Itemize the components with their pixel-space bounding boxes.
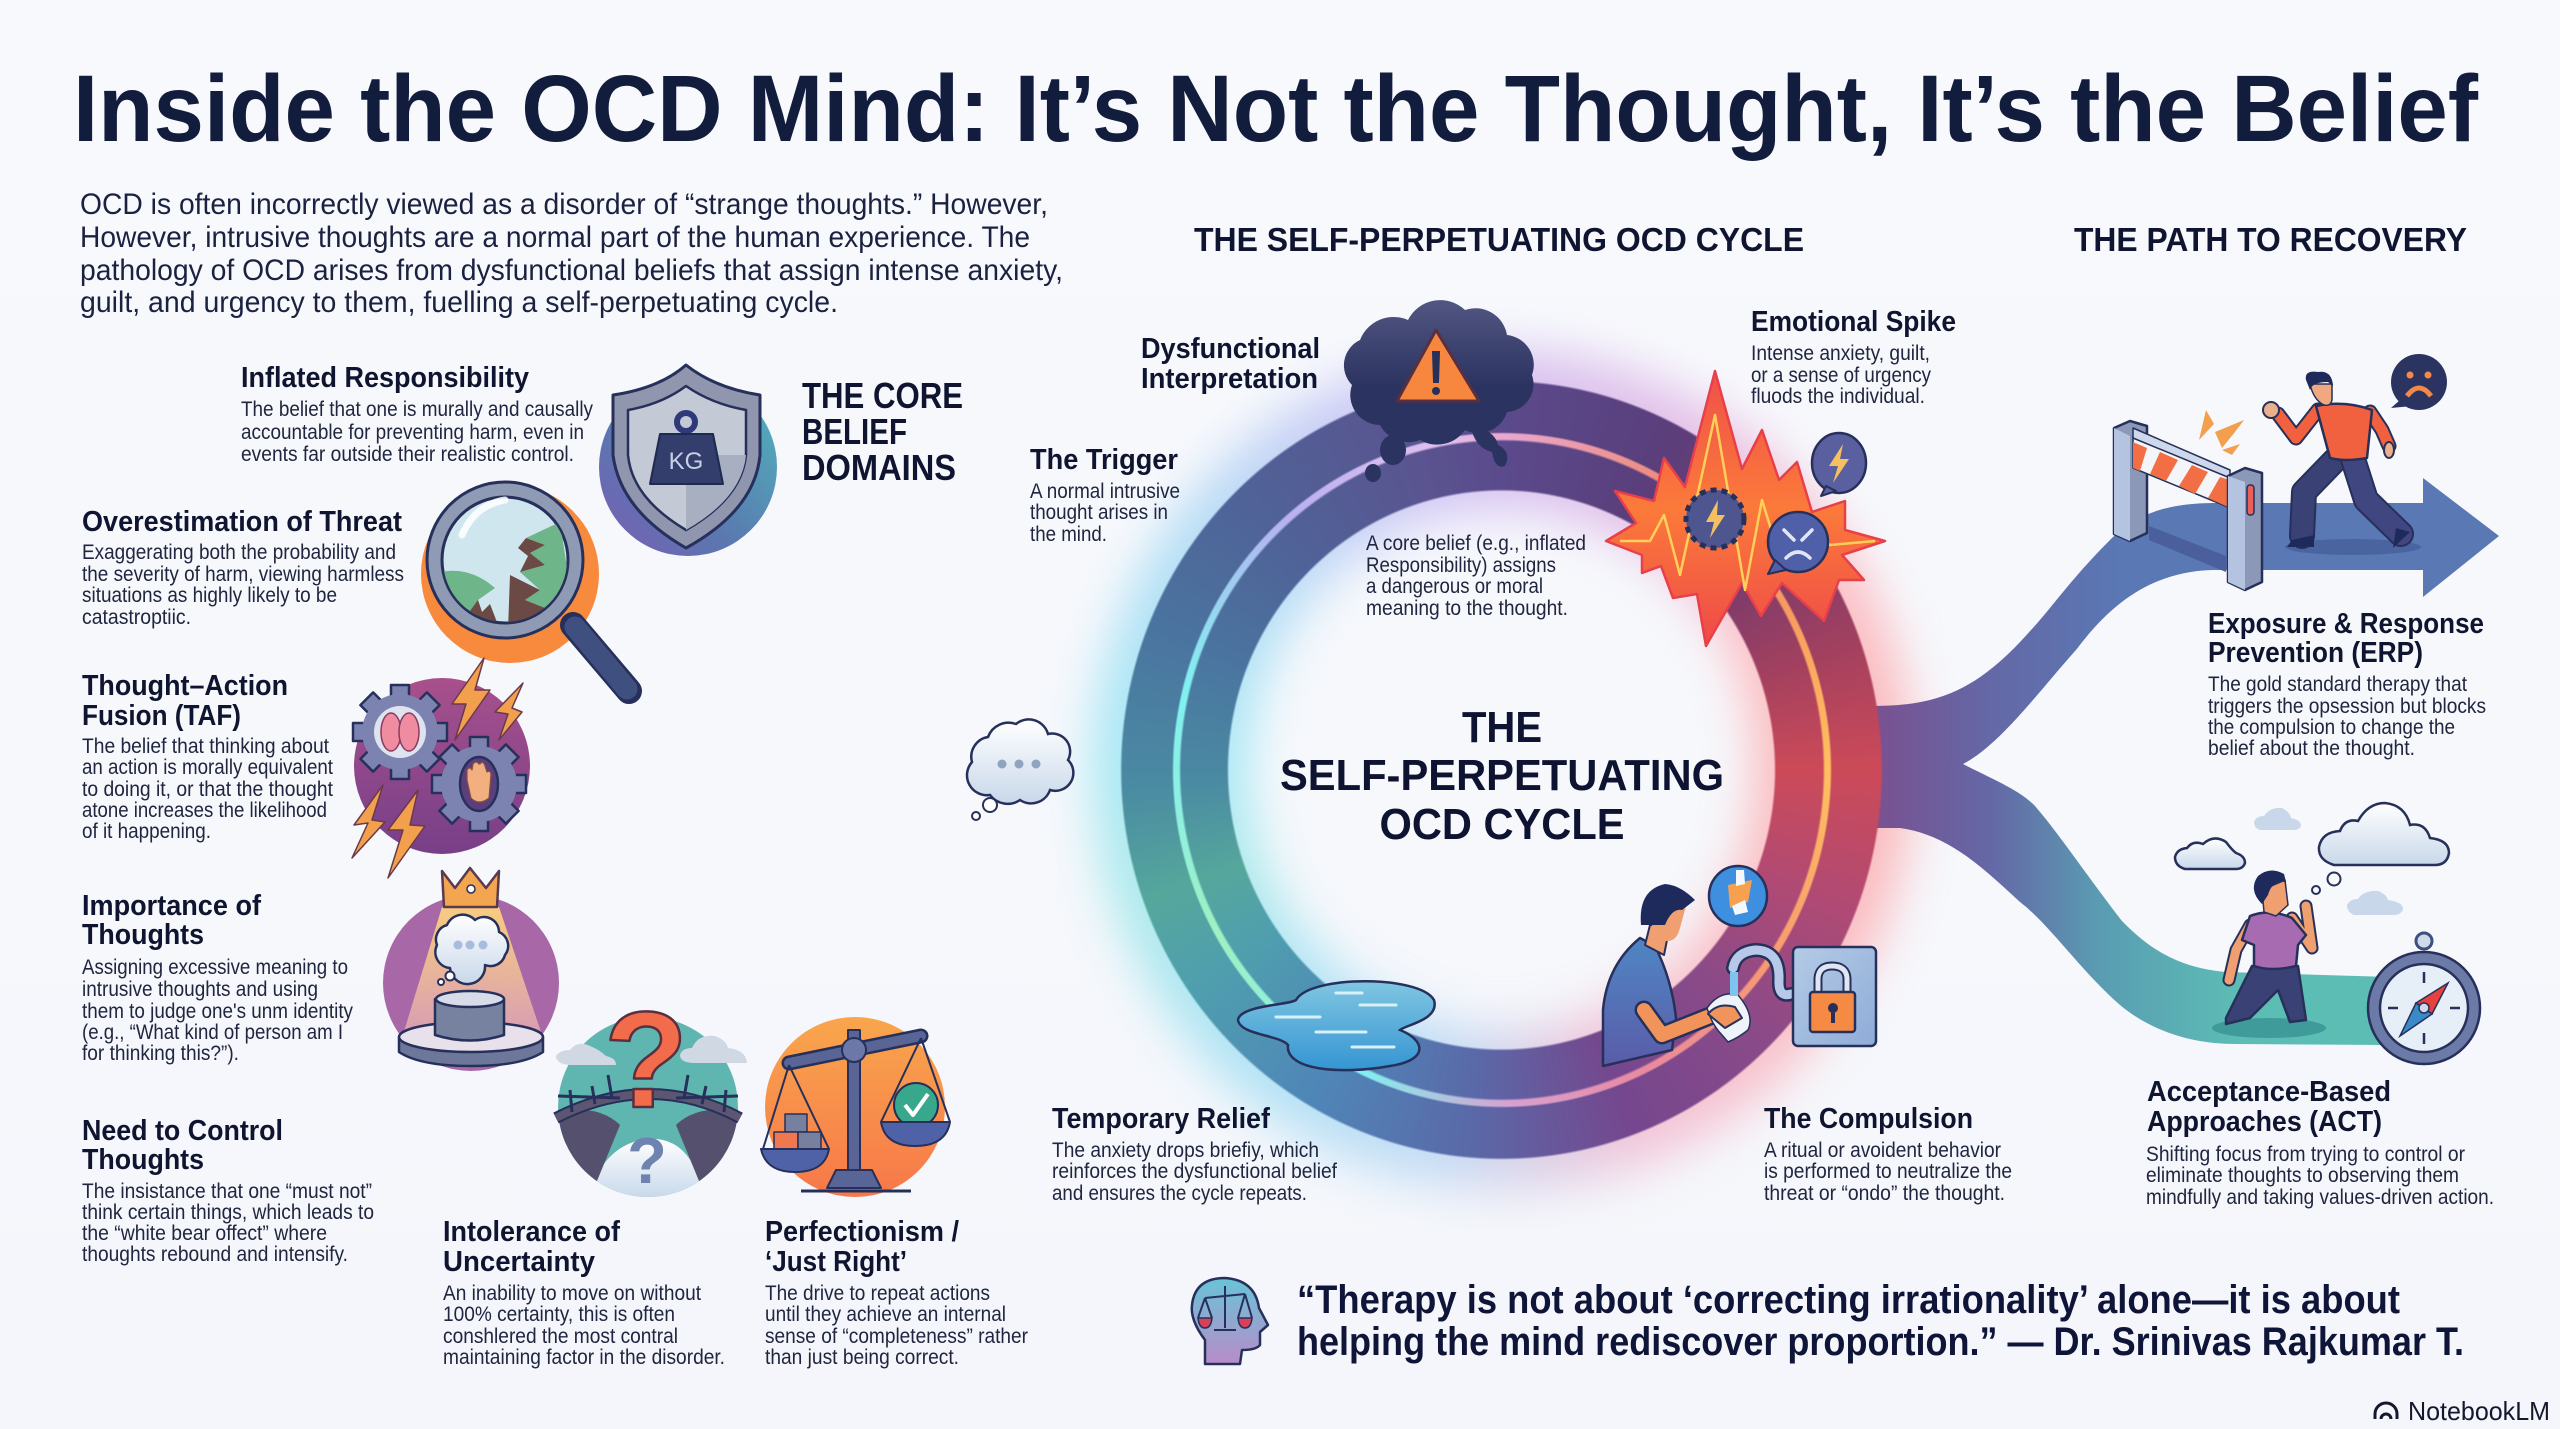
- icon: shield with weight: KG: [669, 448, 703, 475]
- panel: perfectionism text: Perfectionism /: [765, 1216, 959, 1248]
- panel: need to control thoughts text: Thoughts: [82, 1144, 204, 1176]
- NotebookLM mark: NotebookLM: [2408, 1396, 2550, 1426]
- panel: importance of thoughts text: Importance of: [82, 890, 261, 922]
- text: dysfunctional interpretation description: meaning to the thought.: [1366, 597, 1568, 620]
- heading: cycle section: THE SELF-PERPETUATING OCD CYCLE: [1194, 221, 1804, 258]
- arrow: acceptance path: [1870, 764, 2390, 1045]
- label: dysfunctional interpretation: Dysfunctional: [1141, 333, 1320, 365]
- arrow: exposure path: [1870, 478, 2499, 768]
- heading: cycle center title: THE: [1462, 703, 1542, 752]
- panel: thought action fusion text: Fusion (TAF): [82, 700, 241, 732]
- label: exposure and response prevention: Prevention (ERP): [2208, 637, 2423, 669]
- label: the trigger: [1030, 444, 1180, 546]
- icon: dark cloud with warning sign: [1344, 300, 1534, 482]
- label: dysfunctional interpretation: Interpretation: [1141, 363, 1318, 395]
- intro text block: [80, 188, 1063, 319]
- panel: perfectionism text: [765, 1216, 1028, 1369]
- panel: overestimation of threat text: the severity of harm, viewing harmless: [82, 563, 404, 586]
- heading: cycle center title: [1280, 703, 1724, 849]
- panel: overestimation of threat text: [82, 506, 404, 629]
- text: dysfunctional interpretation description: A core belief (e.g., inflated: [1366, 532, 1586, 555]
- panel: importance of thoughts text: [82, 890, 353, 1065]
- icon: puddle: [1238, 981, 1435, 1070]
- label: temporary relief: [1052, 1103, 1337, 1205]
- icon: contamination bubble: [1709, 866, 1767, 926]
- panel: need to control thoughts text: The insistance that one “must not”: [82, 1180, 372, 1203]
- label: acceptance-based approaches: Approaches (ACT): [2147, 1106, 2382, 1138]
- panel: inflated responsibility text: accountable for preventing harm, even in: [241, 421, 584, 444]
- label: the trigger: the mind.: [1030, 523, 1107, 546]
- intro text block: pathology of OCD arises from dysfunctional beliefs that assign intense anxiety,: [80, 254, 1063, 287]
- label: the compulsion: A ritual or avoident behavior: [1764, 1139, 2001, 1162]
- label: exposure and response prevention: Exposure & Response: [2208, 608, 2484, 640]
- panel: intolerance of uncertainty text: Intolerance of: [443, 1216, 620, 1248]
- label: the trigger: thought arises in: [1030, 501, 1168, 524]
- icon: crowned thought on pedestal: [383, 868, 559, 1071]
- icon: question mark over broken bridge: [553, 1010, 747, 1197]
- label: acceptance-based approaches: Shifting focus from trying to control or: [2146, 1143, 2465, 1166]
- heading: core belief domains: BELIEF: [802, 411, 907, 452]
- panel: importance of thoughts text: Thoughts: [82, 919, 204, 951]
- label: dysfunctional interpretation: [1141, 333, 1320, 395]
- icon: head with scale: [1192, 1278, 1268, 1364]
- label: temporary relief: The anxiety drops briefiy, which: [1052, 1139, 1319, 1162]
- label: acceptance-based approaches: mindfully and taking values-driven action.: [2146, 1186, 2494, 1209]
- label: the compulsion: threat or “ondo” the thought.: [1764, 1182, 2005, 1205]
- icon: compass: [2368, 933, 2480, 1064]
- panel: inflated responsibility text: Inflated Responsibility: [241, 362, 529, 394]
- intro text block: OCD is often incorrectly viewed as a disorder of “strange thoughts.” However,: [80, 188, 1048, 221]
- icon: small thought cloud: [967, 719, 1073, 820]
- panel: need to control thoughts text: [82, 1115, 374, 1266]
- label: acceptance-based approaches: [2146, 1076, 2494, 1209]
- intro text block: guilt, and urgency to them, fuelling a self-perpetuating cycle.: [80, 286, 838, 319]
- heading: core belief domains: THE CORE: [802, 375, 963, 416]
- panel: thought action fusion text: The belief that thinking about: [82, 735, 329, 758]
- quote: helping the mind rediscover proportion.” — Dr. Srinivas Rajkumar T.: [1297, 1320, 2464, 1364]
- icon: magnifying glass over a chasm: [421, 482, 629, 691]
- panel: perfectionism text: until they achieve an internal: [765, 1303, 1006, 1326]
- icon: shield with weight: [599, 365, 777, 556]
- label: exposure and response prevention: belief about the thought.: [2208, 737, 2415, 760]
- quote: “Therapy is not about ‘correcting irrationality’ alone—it is about: [1297, 1278, 2400, 1322]
- label: the compulsion: [1764, 1103, 2012, 1205]
- panel: thought action fusion text: of it happening.: [82, 820, 211, 843]
- panel: importance of thoughts text: (e.g., “What kind of person am I: [82, 1021, 343, 1044]
- panel: intolerance of uncertainty text: 100% certainty, this is often: [443, 1303, 675, 1326]
- heading: cycle center title: OCD CYCLE: [1380, 800, 1624, 849]
- panel: thought action fusion text: to doing it, or that the thought: [82, 778, 333, 801]
- panel: importance of thoughts text: them to judge one's unm identity: [82, 1000, 353, 1023]
- label: acceptance-based approaches: eliminate thoughts to observing them: [2146, 1164, 2459, 1187]
- panel: importance of thoughts text: Assigning excessive meaning to: [82, 956, 348, 979]
- panel: importance of thoughts text: for thinking this?”).: [82, 1042, 239, 1065]
- panel: perfectionism text: ‘Just Right’: [765, 1246, 907, 1278]
- label: the compulsion: is performed to neutralize the: [1764, 1160, 2012, 1183]
- icon: barrier on the exposure path: [2114, 410, 2262, 590]
- panel: need to control thoughts text: thoughts rebound and intensify.: [82, 1243, 348, 1266]
- panel: intolerance of uncertainty text: conshlered the most contral: [443, 1325, 678, 1348]
- icon: person washing hands: [1603, 866, 1876, 1066]
- label: temporary relief: reinforces the dysfunctional belief: [1052, 1160, 1337, 1183]
- panel: thought action fusion text: atone increases the likelihood: [82, 799, 327, 822]
- icon: gears with brain and hand: [352, 658, 530, 878]
- label: emotional spike: or a sense of urgency: [1751, 364, 1931, 387]
- icon: emotional spike burst: [1606, 371, 1885, 646]
- panel: inflated responsibility text: [241, 362, 593, 466]
- panel: need to control thoughts text: Need to Control: [82, 1115, 283, 1147]
- icon: sad face bubble: [2391, 354, 2447, 410]
- icon: lightning bubble: [1812, 433, 1866, 496]
- intro text block: However, intrusive thoughts are a normal part of the human experience. The: [80, 221, 1030, 254]
- panel: thought action fusion text: [82, 670, 333, 843]
- label: temporary relief: Temporary Relief: [1052, 1103, 1270, 1135]
- label: the trigger: A normal intrusive: [1030, 480, 1180, 503]
- panel: thought action fusion text: an action is morally equivalent: [82, 756, 333, 779]
- panel: need to control thoughts text: the “white bear offect” where: [82, 1222, 327, 1245]
- label: exposure and response prevention: triggers the opsession but blocks: [2208, 695, 2486, 718]
- label: the compulsion: The Compulsion: [1764, 1103, 1973, 1135]
- heading: cycle center title: SELF-PERPETUATING: [1280, 751, 1724, 800]
- panel: inflated responsibility text: events far outside their realistic control.: [241, 443, 574, 466]
- panel: perfectionism text: sense of “completeness” rather: [765, 1325, 1028, 1348]
- icon: question mark over broken bridge: ?: [604, 984, 688, 1137]
- label: acceptance-based approaches: Acceptance-Based: [2147, 1076, 2391, 1108]
- panel: intolerance of uncertainty text: maintaining factor in the disorder.: [443, 1346, 725, 1369]
- text: dysfunctional interpretation description: a dangerous or moral: [1366, 575, 1543, 598]
- panel: inflated responsibility text: The belief that one is murally and causally: [241, 398, 593, 421]
- ring inner light line: [1172, 432, 1832, 1108]
- OCD cycle ring: [1120, 380, 1883, 1160]
- panel: overestimation of threat text: Overestimation of Threat: [82, 506, 402, 538]
- panel: intolerance of uncertainty text: Uncertainty: [443, 1246, 595, 1278]
- label: the trigger: The Trigger: [1030, 444, 1178, 476]
- icon: angry face bubble: [1768, 512, 1828, 574]
- icon: mindful person: [2212, 870, 2326, 1038]
- text: dysfunctional interpretation description: [1366, 532, 1586, 620]
- icon: person walking through barrier: [2263, 372, 2421, 555]
- label: emotional spike: Intense anxiety, guilt,: [1751, 342, 1930, 365]
- heading: core belief domains: DOMAINS: [802, 447, 956, 488]
- panel: overestimation of threat text: Exaggerating both the probability and: [82, 541, 396, 564]
- label: emotional spike: Emotional Spike: [1751, 306, 1956, 338]
- panel: importance of thoughts text: intrusive thoughts and using: [82, 978, 318, 1001]
- icon: passing clouds: [2175, 803, 2449, 915]
- quote: [1297, 1278, 2464, 1364]
- panel: overestimation of threat text: situations as highly likely to be: [82, 584, 337, 607]
- icon: question mark over broken bridge: ?: [627, 1124, 667, 1197]
- panel: intolerance of uncertainty text: [443, 1216, 725, 1369]
- panel: thought action fusion text: Thought–Action: [82, 670, 288, 702]
- label: exposure and response prevention: [2208, 608, 2486, 760]
- label: emotional spike: fluods the individual.: [1751, 385, 1925, 408]
- panel: overestimation of threat text: catastroptiic.: [82, 606, 191, 629]
- panel: intolerance of uncertainty text: An inability to move on without: [443, 1282, 701, 1305]
- label: temporary relief: and ensures the cycle repeats.: [1052, 1182, 1307, 1205]
- panel: perfectionism text: than just being correct.: [765, 1346, 959, 1369]
- icon: balance scale with check: [761, 1017, 950, 1197]
- text: dysfunctional interpretation description: Responsibility) assigns: [1366, 554, 1556, 577]
- label: exposure and response prevention: the compulsion to change the: [2208, 716, 2455, 739]
- heading: recovery section: THE PATH TO RECOVERY: [2074, 221, 2467, 258]
- heading: core belief domains: [802, 375, 963, 488]
- title: Inside the OCD Mind: It’s Not the Thought, It’s the Belief: [73, 56, 2478, 162]
- label: exposure and response prevention: The gold standard therapy that: [2208, 673, 2467, 696]
- panel: perfectionism text: The drive to repeat actions: [765, 1282, 990, 1305]
- icon: padlock panel: [1793, 947, 1876, 1046]
- label: emotional spike: [1751, 306, 1956, 408]
- panel: need to control thoughts text: think certain things, which leads to: [82, 1201, 374, 1224]
